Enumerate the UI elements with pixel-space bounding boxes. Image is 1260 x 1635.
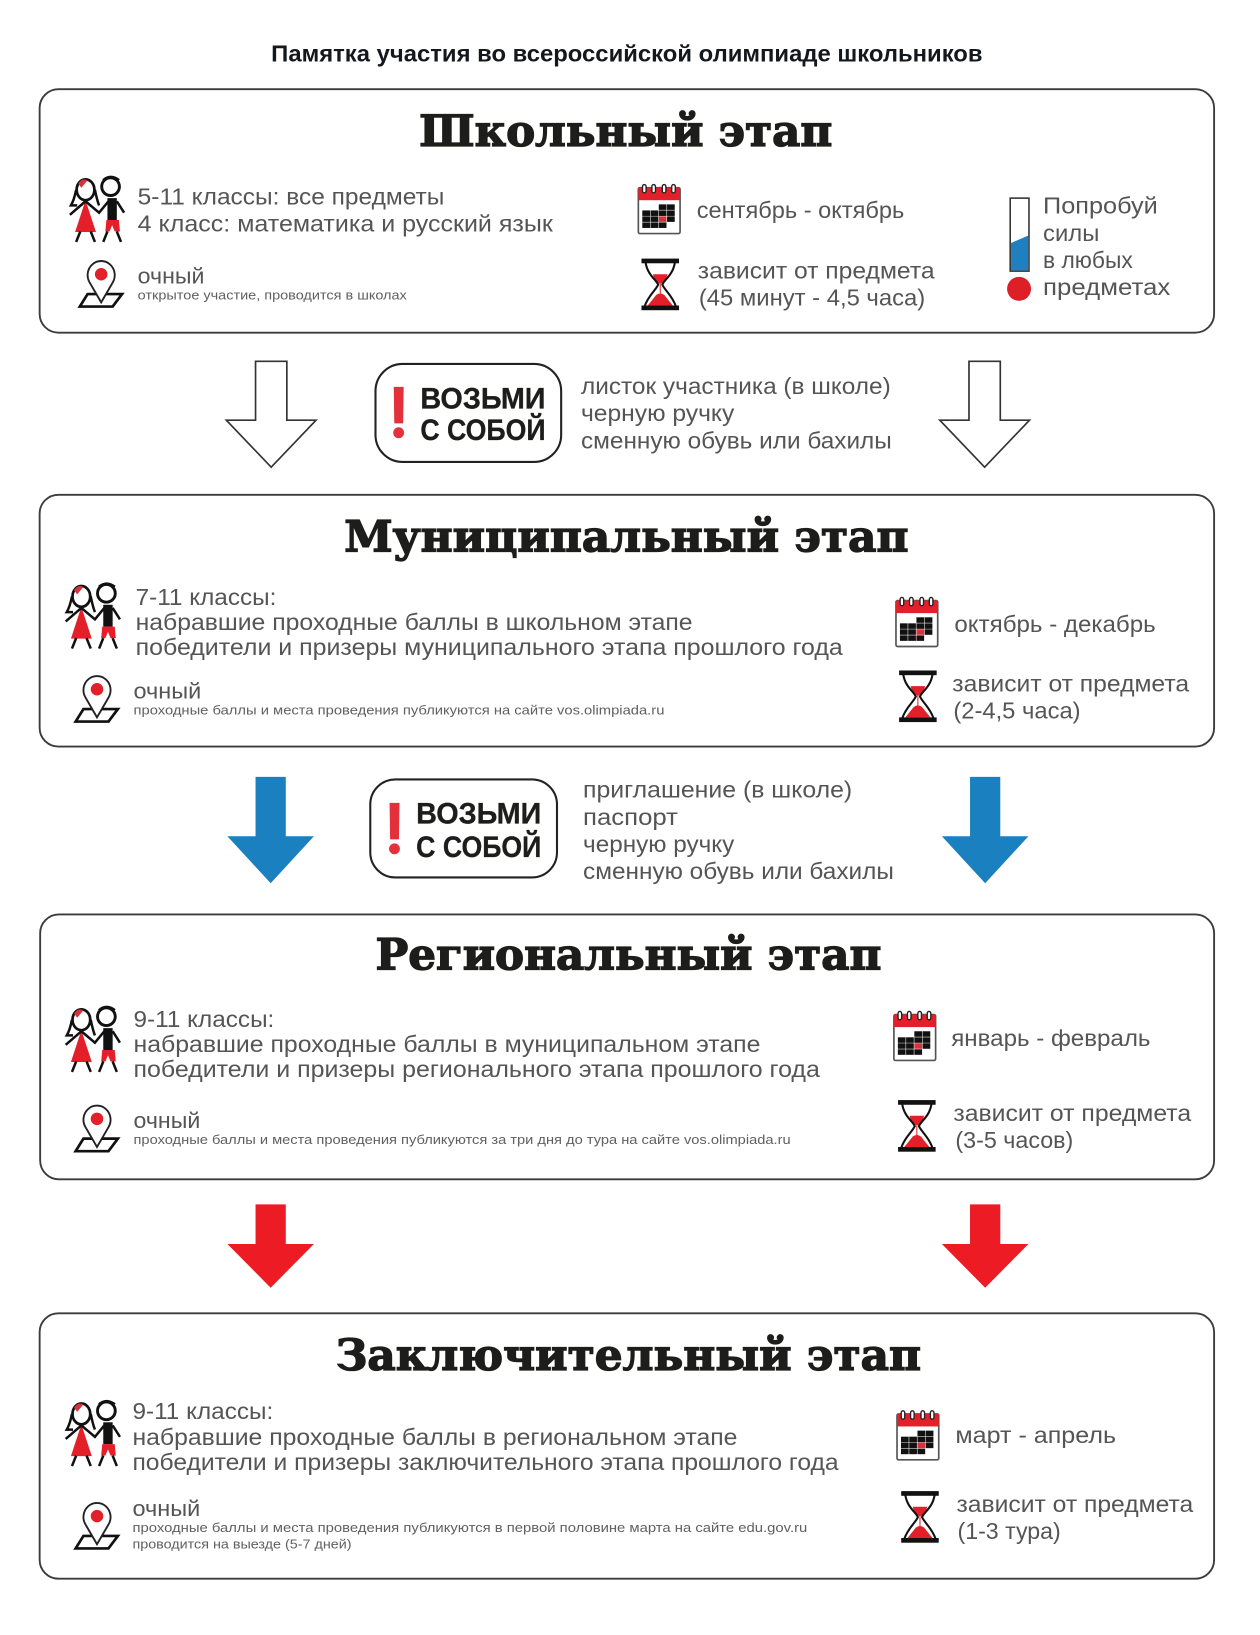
text: classes: победители и призеры регионального этапа прошлого года: [134, 1056, 820, 1082]
text: items list 1: [581, 373, 892, 453]
callout label: [416, 799, 541, 864]
panel frame: [40, 914, 1214, 1179]
text: format: [138, 264, 407, 302]
text: classes: 7-11 классы:: [136, 584, 276, 610]
icon: children: [66, 1401, 120, 1466]
text: classes: набравшие проходные баллы в школьном этапе: [136, 609, 693, 635]
text: duration: [698, 257, 935, 311]
icon: exclamation: [389, 803, 400, 854]
panel: региональный этап: [40, 914, 1214, 1179]
text: duration: зависит от предмета: [953, 1100, 1191, 1126]
icon: calendar: [896, 597, 938, 646]
text: format: очный: [138, 264, 204, 289]
icon: hourglass: [641, 259, 679, 310]
text: dates: март - апрель: [955, 1422, 1116, 1448]
callout label: ВОЗЬМИ: [416, 799, 541, 831]
callout label: С СОБОЙ: [416, 830, 541, 864]
text: duration: (2-4,5 часа): [953, 697, 1081, 723]
heading: Школьный этап: [419, 107, 832, 157]
text: items list 1: черную ручку: [581, 400, 735, 426]
icon: hourglass: [901, 1491, 939, 1543]
text: items list 2: сменную обувь или бахилы: [583, 858, 894, 884]
text: classes: [136, 584, 843, 660]
text: classes: [138, 183, 554, 236]
text: duration: зависит от предмета: [956, 1491, 1193, 1517]
text: classes: набравшие проходные баллы в региональном этапе: [132, 1424, 737, 1450]
icon: children: [66, 584, 120, 649]
icon: calendar: [894, 1011, 936, 1060]
text: items list 1: листок участника (в школе): [581, 373, 891, 399]
arrow: outline left: [226, 361, 316, 467]
text: items list 2: паспорт: [583, 804, 679, 830]
panel: муниципальный этап: [40, 495, 1214, 747]
text: format: проходные баллы и места проведения публикуются в первой половине марта на сайте edu.gov.ru: [132, 1520, 807, 1535]
text: format: [134, 1108, 791, 1147]
icon: hourglass: [898, 1100, 936, 1152]
icon: thermometer: [1007, 198, 1031, 301]
text: try your strength: Попробуй: [1043, 193, 1158, 219]
text: classes: 9-11 классы:: [132, 1398, 273, 1424]
text: format: открытое участие, проводится в школах: [138, 287, 407, 302]
icon: calendar: [897, 1411, 939, 1460]
panel frame: [40, 1313, 1214, 1579]
callout label: [420, 384, 546, 447]
heading: Региональный этап: [375, 931, 881, 981]
text: classes: победители и призеры муниципального этапа прошлого года: [136, 634, 843, 660]
icon: children: [70, 177, 124, 242]
text: format: очный: [132, 1496, 200, 1521]
icon: children: [66, 1007, 120, 1072]
panel: школьный этап: [40, 89, 1214, 333]
icon: location pin: [80, 261, 122, 307]
icon: location pin: [76, 1106, 118, 1151]
callout: take with you 1: [375, 364, 561, 462]
text: format: [132, 1496, 807, 1551]
text: duration: зависит от предмета: [698, 257, 935, 283]
text: items list 2: черную ручку: [583, 831, 735, 857]
title: Памятка участия во всероссийской олимпиаде школьников: [271, 41, 983, 67]
callout: take with you 2: [370, 779, 557, 877]
text: classes: 5-11 классы: все предметы: [138, 183, 444, 209]
arrow: blue right: [942, 777, 1028, 883]
text: format: очный: [134, 1108, 200, 1133]
arrow: outline right: [940, 361, 1029, 467]
icon: location pin: [76, 1503, 118, 1548]
text: classes: [132, 1398, 839, 1475]
icon: exclamation: [393, 387, 404, 438]
text: classes: [134, 1006, 820, 1082]
icon: hourglass: [899, 670, 937, 722]
text: format: проходные баллы и места проведения публикуются на сайте vos.olimpiada.ru: [134, 702, 664, 717]
text: dates: октябрь - декабрь: [954, 611, 1156, 637]
text: duration: (45 минут - 4,5 часа): [699, 285, 925, 311]
callout label: ВОЗЬМИ: [420, 384, 546, 416]
text: classes: 9-11 классы:: [134, 1006, 274, 1032]
icon: location pin: [76, 676, 118, 722]
callout label: С СОБОЙ: [420, 413, 546, 447]
panel frame: [40, 89, 1214, 333]
arrow: red left: [227, 1204, 314, 1288]
text: dates: сентябрь - октябрь: [697, 197, 904, 223]
text: items list 2: приглашение (в школе): [583, 777, 852, 803]
text: duration: (3-5 часов): [955, 1127, 1073, 1153]
icon: calendar: [638, 185, 680, 234]
text: duration: (1-3 тура): [958, 1518, 1061, 1544]
text: duration: [956, 1491, 1193, 1544]
text: try your strength: [1043, 193, 1171, 300]
heading: Муниципальный этап: [344, 513, 908, 563]
heading: Заключительный этап: [336, 1331, 921, 1381]
panel frame: [40, 495, 1214, 747]
text: format: очный: [134, 679, 201, 704]
text: classes: набравшие проходные баллы в муниципальном этапе: [134, 1031, 760, 1057]
text: classes: победители и призеры заключительного этапа прошлого года: [132, 1449, 839, 1475]
text: try your strength: в любых: [1043, 247, 1133, 273]
arrow: blue left: [227, 777, 314, 883]
text: duration: [952, 670, 1189, 723]
text: items list 2: [583, 777, 894, 884]
text: format: [134, 679, 664, 717]
text: duration: [953, 1100, 1191, 1153]
panel: заключительный этап: [40, 1313, 1214, 1579]
text: classes: 4 класс: математика и русский язык: [138, 210, 554, 236]
text: try your strength: предметах: [1043, 274, 1171, 300]
text: format: проводится на выезде (5-7 дней): [132, 1536, 352, 1551]
arrow: red right: [942, 1204, 1028, 1288]
text: items list 1: сменную обувь или бахилы: [581, 427, 892, 453]
text: dates: январь - февраль: [951, 1025, 1151, 1051]
text: format: проходные баллы и места проведения публикуются за три дня до тура на сайте vos.olimpiada.ru: [134, 1132, 791, 1147]
text: try your strength: силы: [1043, 220, 1099, 246]
text: duration: зависит от предмета: [952, 670, 1189, 696]
